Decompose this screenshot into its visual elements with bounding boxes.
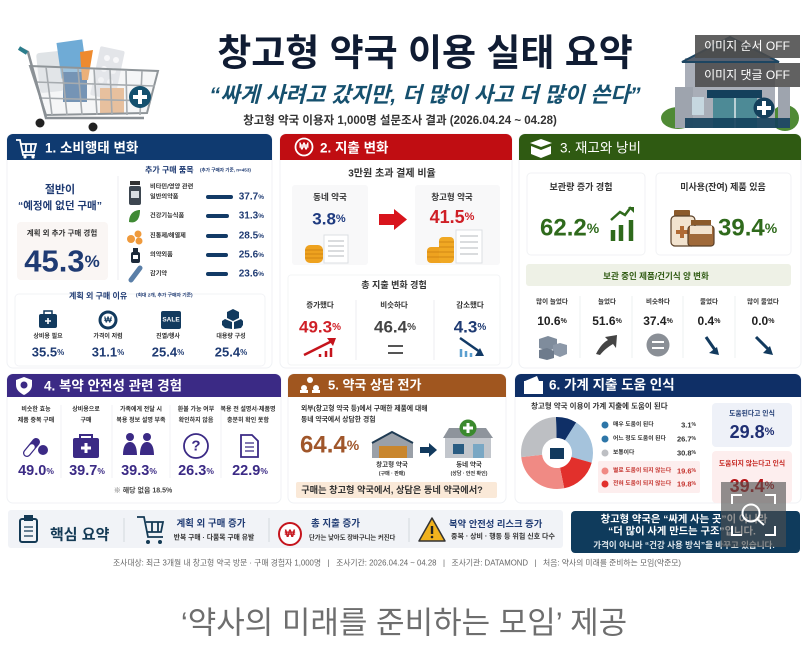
- summary bar: [8, 510, 563, 548]
- list: additional purchase items: [127, 164, 264, 280]
- note: none applicable: ※ 해당 없음 18.5%: [114, 486, 173, 494]
- panel header 4: 4. 복약 안전성 관련 경험: [44, 378, 182, 394]
- summary item: unplanned purchase: [137, 517, 255, 544]
- list: additional purchase items: 37.7%: [239, 192, 264, 202]
- reason: display and event: SALE: [162, 316, 180, 324]
- panel header 5: 5. 약국 상담 전가: [328, 378, 421, 392]
- icon: neighbourhood pharmacy: (상담 · 안전 확인): [451, 470, 488, 477]
- stat: more: 51.6%: [592, 314, 623, 328]
- stat: 64.4%: 64.4%: [300, 432, 360, 458]
- panel: total spending change: [288, 275, 500, 365]
- legend: 매우 도움이 된다: [613, 420, 654, 428]
- stat: less: 0.4%: [698, 314, 721, 328]
- overlay: image zoom button: [721, 482, 786, 547]
- callout: conclusion: 가격이 아니라 “건강 사용 방식”을 바꾸고 있습니다.: [593, 540, 775, 550]
- stat: stocked as regular: [69, 405, 105, 479]
- half unplanned heading: “예정에 없던 구매”: [18, 199, 102, 212]
- stat: much more: [536, 296, 568, 360]
- card: helpful 29.8%: [712, 403, 792, 447]
- stat: stocked as regular: 상비용으로: [72, 405, 100, 413]
- reason: cheap price: 가격이 저렴: [93, 332, 123, 340]
- callout: buy at warehouse, consult locally: 구매는 창고형 약국에서, 상담은 동네 약국에서?: [301, 484, 483, 495]
- summary item: total spending: ₩: [285, 528, 296, 540]
- heading: key summary: 핵심 요약: [50, 526, 110, 544]
- icon: painkiller capsules: [127, 230, 142, 244]
- stat: much more: 많이 늘었다: [536, 296, 568, 306]
- list: additional purchase items: (추가 구매자 기준, n=453): [200, 166, 251, 174]
- panel header 2: ₩: [299, 142, 309, 152]
- list: additional purchase items: 28.5%: [239, 230, 264, 242]
- stat: refund not checked: 26.3%: [178, 463, 214, 479]
- card: storage increase 62.2%: 보관량 증가 경험: [550, 181, 612, 192]
- stat: decreased: 감소했다: [456, 300, 484, 310]
- stat: similar: [643, 296, 674, 356]
- stat: family information: [116, 405, 166, 479]
- icon: warehouse: [372, 432, 413, 477]
- subtitle: 창고형 약국 이용이 가계 지출에 도움이 된다: [531, 400, 668, 410]
- stat: decreased: 4.3%: [454, 318, 486, 336]
- card: helpful 29.8%: 29.8%: [730, 422, 775, 442]
- band: storage change heading: 보관 중인 제품/건기식 양 변화: [603, 271, 709, 281]
- stat: refund not checked: 확인하지 않음: [179, 416, 214, 424]
- summary item: unplanned purchase: 계획 외 구매 증가: [176, 518, 246, 530]
- stat: similar ingredient: 제품 중복 구매: [18, 416, 54, 424]
- stat: unplanned purchase 45.3%: 계획 외 추가 구매 경험: [27, 228, 97, 238]
- summary item: total spending: [279, 518, 396, 545]
- card: warehouse pharmacy 41.5%: 41.5%: [430, 207, 475, 227]
- panel header 6: [515, 374, 801, 397]
- stat: similar ingredient: [18, 405, 54, 479]
- legend: 19.6%: [677, 466, 697, 476]
- stat: instructions not checked: [220, 405, 276, 479]
- legend: 26.7%: [677, 434, 697, 444]
- half unplanned heading: 절반이: [45, 183, 75, 196]
- list: additional purchase items: 23.6%: [239, 268, 264, 280]
- panel: 5 pharmacy consultation transfer: [288, 374, 506, 503]
- image caption: ‘약사의 미래를 준비하는 모임’ 제공: [181, 606, 627, 640]
- legend: 3.1%: [681, 420, 697, 430]
- legend: 전혀 도움이 되지 않는다: [613, 479, 672, 487]
- stat: increased: [299, 300, 341, 357]
- panel header 1: [7, 134, 272, 160]
- footer source note: 조사대상: 최근 3개월 내 창고형 약국 방문 · 구매 경험자 1,000명 | 조사기간: 2026.04.24 ~ 04.28 | 조사기관: DATAMOND | 처음: 약사의 미래를 준비하는 모임(약준모): [113, 558, 681, 568]
- icon: external medicine bottle: [131, 248, 140, 263]
- panel: total spending change: 총 지출 변화 경험: [361, 279, 427, 290]
- panel: 2 spending change: [280, 134, 512, 368]
- overlay button: image comments off: [695, 63, 800, 87]
- panel: 4 medication safety: [7, 374, 281, 503]
- quote subtitle: “싸게 사려고 갔지만, 더 많이 사고 더 많이 쓴다”: [209, 83, 641, 107]
- legend: 어느 정도 도움이 된다: [613, 434, 666, 442]
- panel header 5: [288, 374, 506, 397]
- stat: much less: [747, 296, 779, 355]
- stat: unplanned purchase 45.3%: 45.3%: [24, 244, 100, 278]
- stat: instructions not checked: 복용 전 설명서·제품명: [220, 405, 276, 413]
- overlay button: image order off: 이미지 순서 OFF: [704, 39, 790, 53]
- summary item: unplanned purchase: 반복 구매 · 다품목 구매 유발: [174, 532, 255, 542]
- band: storage change heading: [526, 264, 791, 286]
- stat: decreased: [454, 300, 486, 357]
- list: additional purchase items: 건강기능식품: [150, 212, 184, 220]
- stat: family information: 가족에게 전달 시: [120, 405, 162, 413]
- panel header 3: 3. 재고와 낭비: [560, 140, 641, 156]
- stat: family information: 복용 정보 설명 부족: [116, 416, 166, 424]
- list: additional purchase items: 25.6%: [239, 250, 264, 260]
- stat: much more: 10.6%: [537, 314, 568, 328]
- stat: refund not checked: [178, 405, 215, 479]
- survey description: 창고형 약국 이용자 1,000명 설문조사 결과 (2026.04.24 ~ 04.28): [243, 113, 557, 127]
- icon: wallet: [550, 448, 564, 459]
- card: neighbourhood pharmacy 3.8%: 동네 약국: [313, 192, 347, 202]
- panel: 6 household spending perception: [515, 374, 801, 503]
- reason: regular need: 상비용 필요: [33, 332, 63, 340]
- callout: buy at warehouse, consult locally: [296, 482, 497, 498]
- panel header 6: 6. 가계 지출 도움 인식: [549, 378, 675, 392]
- stat: unplanned purchase 45.3%: [17, 222, 108, 280]
- reason: cheap price: [92, 310, 124, 360]
- card: warehouse pharmacy 41.5%: [415, 185, 500, 265]
- panel header 1: 1. 소비행태 변화: [45, 140, 139, 156]
- card: storage increase 62.2%: [527, 173, 645, 255]
- icon: neighbourhood pharmacy: 동네 약국: [456, 460, 482, 468]
- heading: over 30,000 won ratio: 3만원 초과 결제 비율: [348, 166, 436, 180]
- card: neighbourhood pharmacy 3.8%: 3.8%: [312, 210, 346, 228]
- reason: bulk packaging: [215, 309, 247, 360]
- stat: family information: 39.3%: [121, 463, 157, 479]
- stat: less: [698, 296, 721, 355]
- list: additional purchase items: 의약외품: [150, 250, 173, 258]
- stat: less: 줄었다: [700, 296, 718, 306]
- card: helpful 29.8%: 도움된다고 인식: [729, 408, 775, 418]
- reason: display and event: 25.4%: [152, 344, 184, 360]
- panel header 4: [7, 374, 281, 397]
- summary item: total spending: 단가는 낮아도 장바구니는 커진다: [309, 532, 396, 542]
- list: additional purchase items: 일반의약품: [150, 192, 179, 200]
- stat: stocked as regular: 39.7%: [69, 463, 105, 479]
- stat: instructions not checked: 22.9%: [232, 463, 268, 479]
- list: additional purchase items: 비타민/영양 관련: [150, 182, 194, 190]
- reason: regular need: [32, 311, 64, 360]
- icon: pharmacy building: [661, 37, 799, 131]
- stat: stocked as regular: 구매: [80, 416, 92, 424]
- half unplanned heading: [18, 183, 102, 212]
- summary item: medication risk: [419, 518, 556, 541]
- summary item: total spending: 총 지출 증가: [311, 518, 360, 530]
- description text: 동네 약국에서 상담한 경험: [301, 414, 375, 424]
- stat: similar: 37.4%: [643, 314, 674, 328]
- stat: instructions not checked: 충분히 확인 못함: [227, 416, 269, 424]
- card: unused products 39.4%: 미사용(잔여) 제품 있음: [680, 181, 766, 192]
- card: warehouse pharmacy 41.5%: 창고형 약국: [431, 192, 473, 202]
- stat: increased: 증가했다: [306, 300, 334, 310]
- donut chart: [532, 428, 582, 478]
- stat: much less: 많이 줄었다: [747, 296, 779, 306]
- reason: display and event: [152, 311, 184, 360]
- summary item: medication risk: 중복 · 상비 · 행동 등 위험 신호 다수: [451, 532, 556, 540]
- icon: shopping cart with medicines: [19, 39, 158, 132]
- legend: 30.8%: [677, 448, 697, 458]
- stat: similar ingredient: 49.0%: [18, 463, 54, 479]
- title: 창고형 약국 이용 실태 요약: [217, 32, 633, 74]
- callout: conclusion: [571, 511, 800, 553]
- reason: bulk packaging: 대용량 구성: [216, 332, 246, 340]
- card: neighbourhood pharmacy 3.8%: [292, 185, 368, 265]
- icon: neighbourhood pharmacy: [443, 420, 493, 477]
- icon: health supplement leaf: [129, 210, 140, 222]
- icon: cold medicine capsule: [131, 268, 140, 280]
- stat: similar: [374, 300, 416, 353]
- card: not helpful 39.4%: 도움되지 않는다고 인식: [719, 458, 785, 468]
- stat: more: [592, 296, 623, 355]
- icon: clipboard: [20, 516, 37, 542]
- panel header 2: 2. 지출 변화: [320, 140, 389, 156]
- stat: similar: 비슷하다: [380, 300, 408, 310]
- stat: refund not checked: ?: [191, 438, 201, 454]
- reason: bulk packaging: 25.4%: [215, 344, 247, 360]
- arrow: navy: [420, 443, 437, 457]
- panel: reasons for unplanned purchase: [15, 290, 265, 366]
- callout: conclusion: 창고형 약국은 “싸게 사는 곳”이 아니라: [601, 512, 768, 526]
- list: additional purchase items: 31.3%: [239, 210, 264, 222]
- reason: display and event: 진열/행사: [156, 332, 180, 340]
- legend: 보통이다: [613, 448, 635, 456]
- reason: cheap price: 31.1%: [92, 344, 124, 360]
- card: not helpful 39.4%: 39.4%: [730, 476, 775, 496]
- card: unused products 39.4%: [656, 173, 791, 255]
- list: additional purchase items: 진통제/해열제: [150, 232, 186, 240]
- icon: warehouse: 창고형 약국: [376, 460, 408, 468]
- panel: reasons for unplanned purchase: 계획 외 구매 이유: [69, 290, 128, 300]
- stat: much less: 0.0%: [752, 314, 775, 328]
- panel header 3: [519, 134, 801, 160]
- overlay button: image order off: [695, 35, 800, 58]
- legend: [598, 420, 700, 493]
- overlay button: image comments off: 이미지 댓글 OFF: [704, 68, 790, 82]
- card: unused products 39.4%: 39.4%: [718, 214, 778, 242]
- callout: conclusion: “더 많이 사게 만드는 구조”입니다.: [608, 524, 756, 538]
- stat: similar ingredient: 비슷한 효능: [21, 405, 51, 413]
- description text: [301, 404, 428, 424]
- summary item: medication risk: 복약 안전성 리스크 증가: [449, 518, 543, 529]
- arrow: red: [379, 209, 407, 230]
- stat: more: 늘었다: [598, 296, 616, 306]
- reason: cheap price: ₩: [104, 316, 112, 324]
- icon: warehouse: (구매 · 판매): [379, 470, 405, 477]
- legend: 19.8%: [677, 480, 697, 488]
- panel: 1 consumption behaviour: [7, 134, 272, 368]
- description text: 외부(창고형 약국 등)에서 구매한 제품에 대해: [301, 404, 428, 412]
- panel header 2: [280, 134, 512, 160]
- card: not helpful 39.4%: [712, 451, 792, 503]
- card: storage increase 62.2%: 62.2%: [540, 214, 600, 242]
- reason: regular need: 35.5%: [32, 344, 64, 360]
- list: additional purchase items: 감기약: [150, 270, 167, 278]
- stat: similar: 46.4%: [374, 318, 416, 336]
- stat: similar: 비슷하다: [646, 296, 670, 306]
- list: additional purchase items: 추가 구매 품목: [145, 164, 194, 174]
- legend: 별로 도움이 되지 않는다: [613, 466, 672, 474]
- panel: 3 stock and waste: [519, 134, 801, 368]
- icon: vitamin bottle: [129, 181, 141, 205]
- stat: increased: 49.3%: [299, 318, 341, 336]
- stat: refund not checked: 환불 가능 여부: [178, 405, 215, 413]
- panel: reasons for unplanned purchase: (최대 2개, 추가 구매자 기준): [136, 292, 193, 298]
